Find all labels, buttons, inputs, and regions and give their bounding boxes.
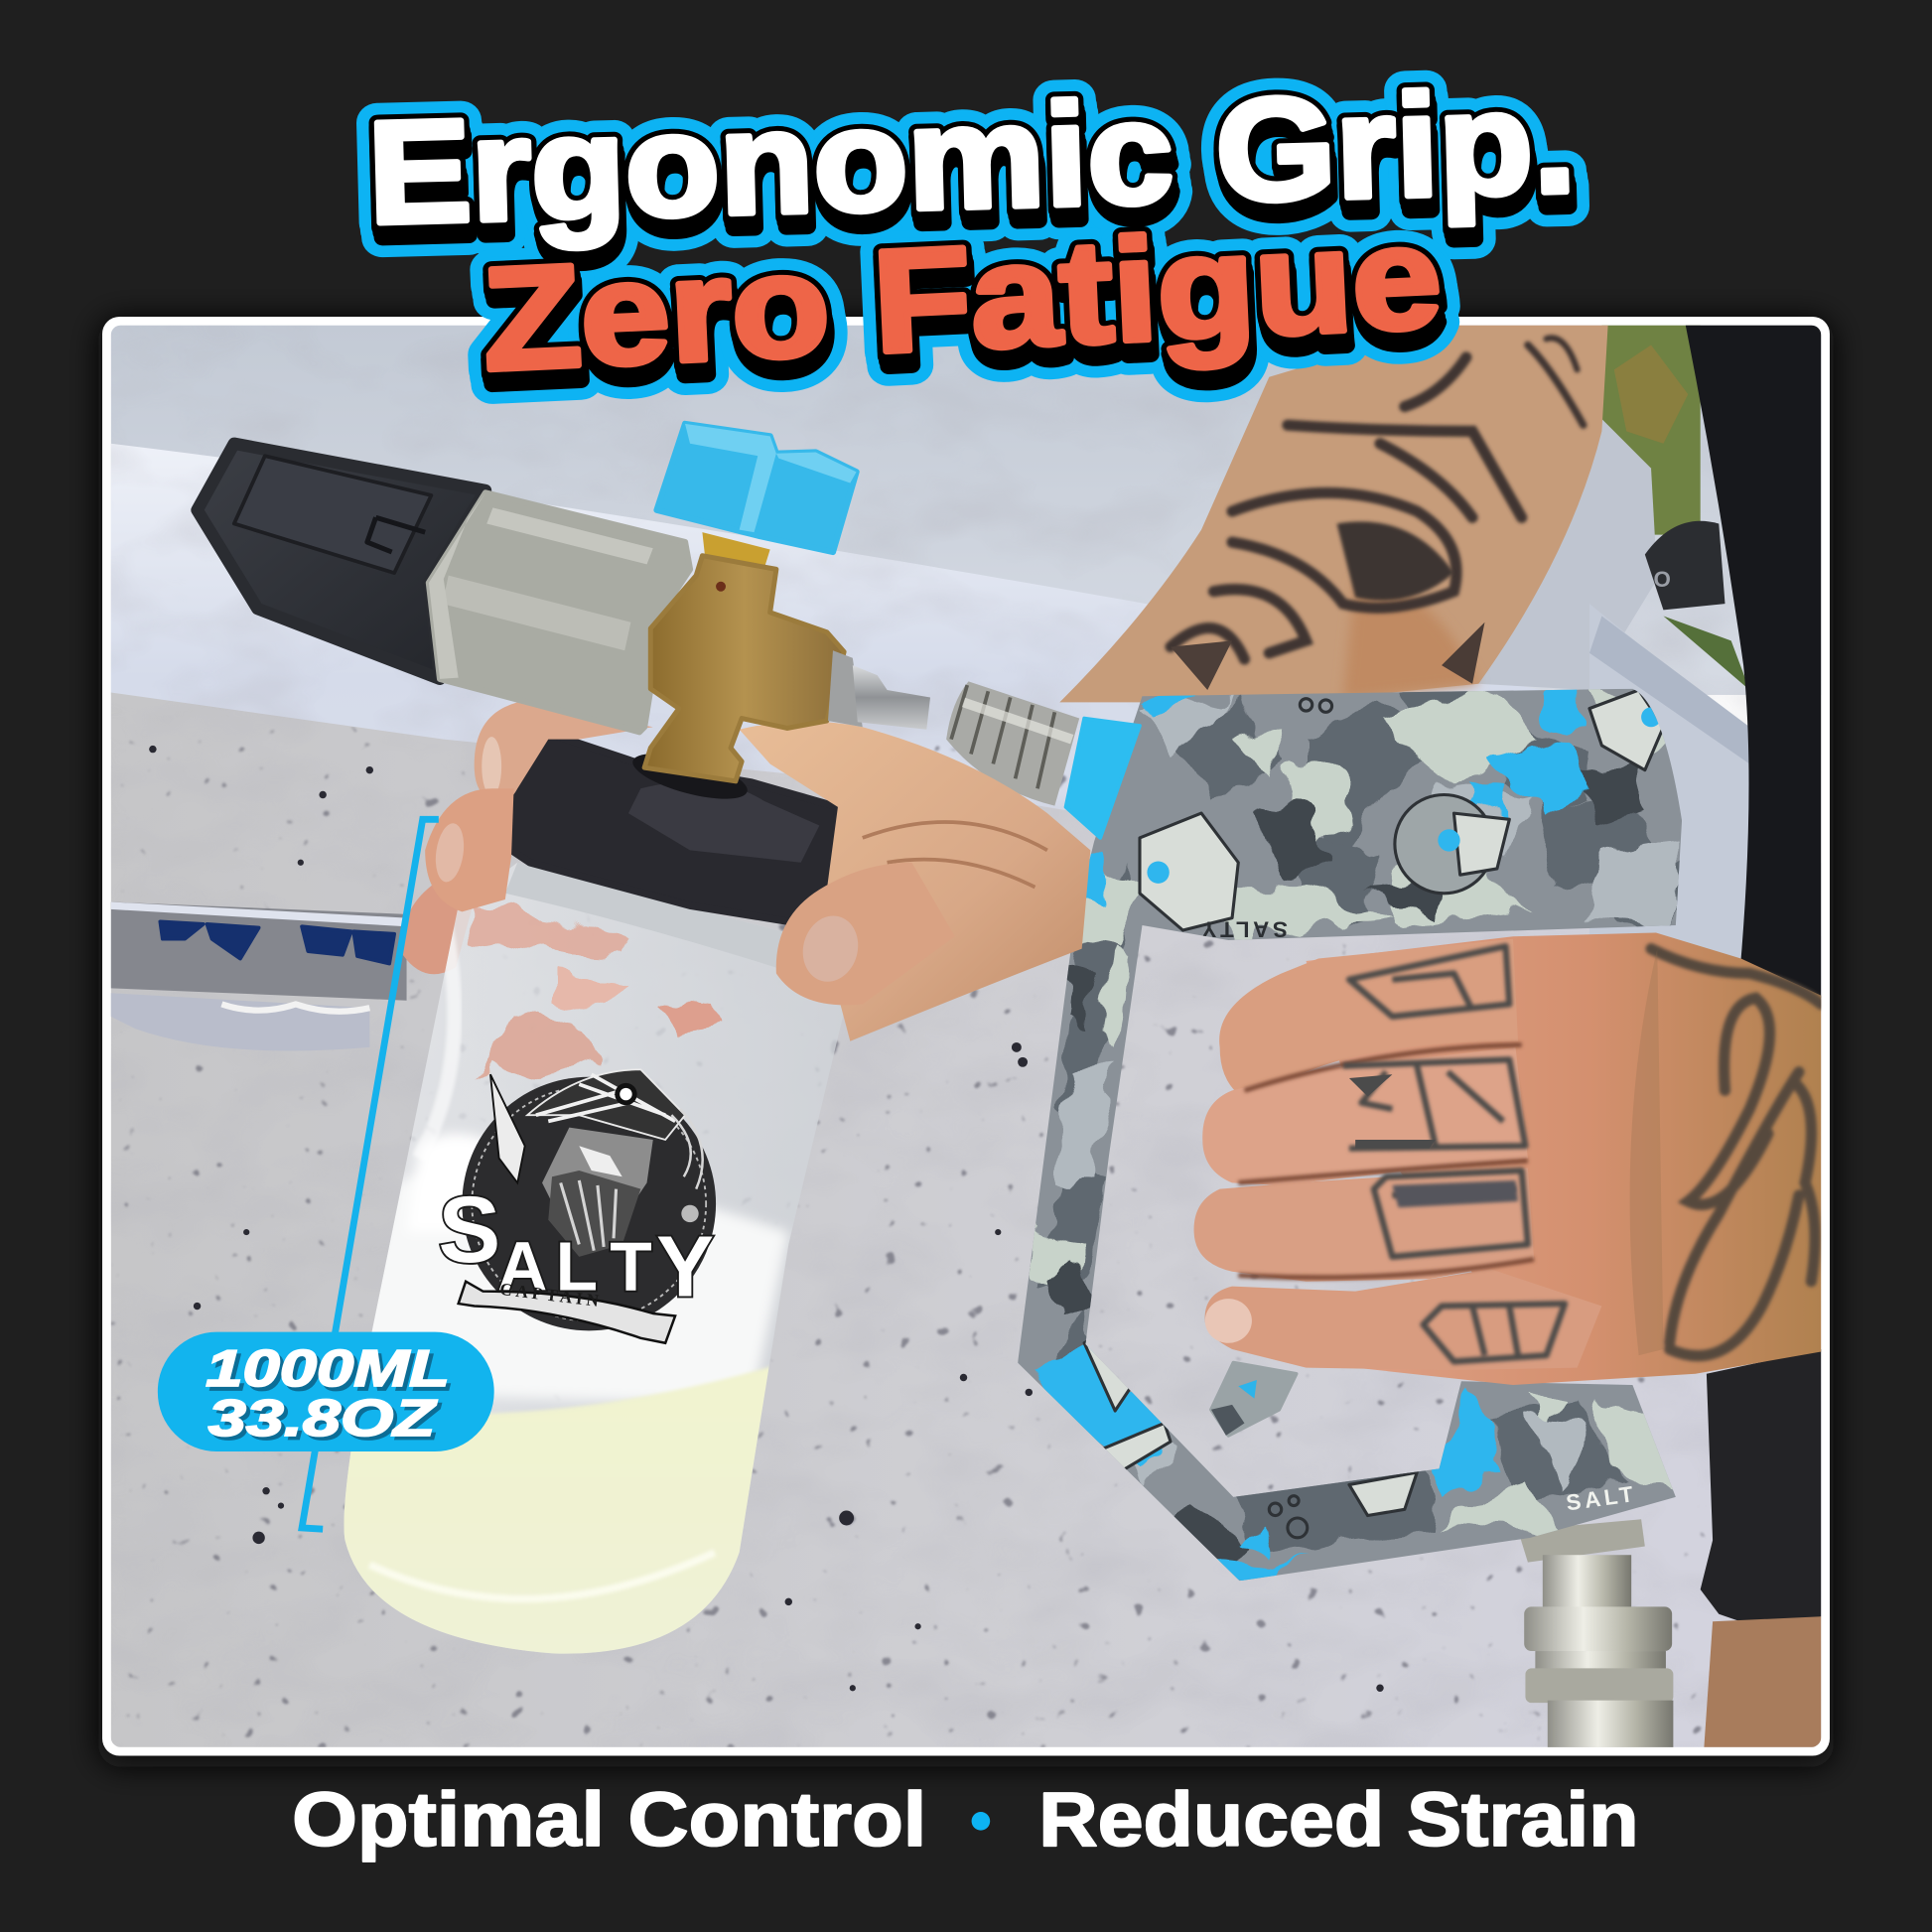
title cyan outline: Ergonomic Grip. xyxy=(368,75,1580,270)
pirate face and beard xyxy=(542,1128,653,1232)
foam residue patches xyxy=(475,905,721,1078)
palm xyxy=(740,722,1090,1041)
cyan knob xyxy=(656,424,857,569)
title black extrusion: Zero Fatigue xyxy=(481,206,1446,411)
background: tree and windshield: O xyxy=(1654,567,1671,592)
logo: Salty Captain: CAPTAIN xyxy=(498,1280,604,1311)
background: black shirt xyxy=(1686,326,1821,998)
title cyan outline: Zero Fatigue xyxy=(482,210,1447,416)
knuckle tattoos xyxy=(1343,946,1565,1361)
title black extrusion: Zero Fatigue xyxy=(482,210,1447,416)
title black extrusion: Ergonomic Grip. xyxy=(368,75,1580,270)
salty wordmark: Y xyxy=(656,1219,714,1315)
benefit: optimal control: Optimal Control xyxy=(292,1777,926,1863)
thumb xyxy=(776,863,955,1005)
title line two: Zero Fatigue xyxy=(480,196,1445,401)
captain ribbon xyxy=(459,1282,675,1343)
title cyan outline xyxy=(366,61,1580,416)
title black extrusion: Zero Fatigue xyxy=(480,201,1445,406)
badge pill xyxy=(158,1332,494,1451)
title cyan outline: Ergonomic Grip. xyxy=(367,68,1579,262)
background: foam covered car xyxy=(111,326,1821,1747)
background: tree and windshield xyxy=(1478,326,1756,961)
title cyan outline: Zero Fatigue xyxy=(480,196,1445,401)
foam cannon xyxy=(198,424,930,781)
badge text shadow: 1000ML xyxy=(209,1344,454,1402)
coupling and hose fitting xyxy=(1518,1519,1673,1749)
sword xyxy=(490,1074,525,1182)
gun body camo: SALTY xyxy=(1198,916,1288,941)
title cyan outline: Zero Fatigue xyxy=(481,203,1446,409)
black nozzle xyxy=(198,444,485,679)
gun body camo: SALT xyxy=(1565,1481,1638,1516)
steel nipple xyxy=(828,650,930,730)
index finger xyxy=(475,702,653,802)
rope xyxy=(671,1109,703,1189)
badge text shadow xyxy=(209,1344,454,1451)
background: shorts xyxy=(1701,1349,1821,1629)
forearm with tattoos xyxy=(1059,326,1608,702)
salty wordmark: S xyxy=(438,1177,500,1282)
title black extrusion: Zero Fatigue xyxy=(480,196,1445,401)
finger four xyxy=(1205,1269,1601,1370)
finger three xyxy=(1194,1169,1534,1282)
left hand xyxy=(425,702,1090,1041)
pirate hat xyxy=(527,1069,685,1140)
large droplets on foam xyxy=(149,746,1384,1692)
brass body xyxy=(644,556,844,781)
badge text: 33.8OZ xyxy=(208,1390,438,1448)
badge text shadow: 33.8OZ xyxy=(211,1394,442,1451)
middle finger xyxy=(425,788,514,911)
trigger xyxy=(1211,1363,1297,1436)
finger one xyxy=(1219,939,1518,1094)
title black extrusion xyxy=(366,61,1580,416)
panel shadow xyxy=(98,318,1834,1767)
camo skull emblems xyxy=(1084,690,1663,1538)
salty wordmark xyxy=(438,1177,714,1315)
background: blue car trim xyxy=(111,901,407,1050)
finger two xyxy=(1202,1047,1528,1185)
steel hose end xyxy=(946,681,1079,806)
grey barrel xyxy=(429,492,690,732)
capacity bracket xyxy=(302,819,439,1529)
wrist tattoos xyxy=(1651,949,1821,1356)
badge text: 1000ML xyxy=(206,1340,450,1398)
rear fingers seen behind bottle xyxy=(402,878,475,974)
finger seams xyxy=(1238,1044,1534,1278)
title cyan outline: Ergonomic Grip. xyxy=(366,61,1578,255)
badge text xyxy=(206,1340,450,1448)
capacity badge xyxy=(158,1332,494,1451)
title black extrusion: Ergonomic Grip. xyxy=(366,66,1578,260)
background: leg xyxy=(1704,1616,1821,1747)
footer benefits xyxy=(292,1777,1639,1863)
gun body camo xyxy=(1011,678,1701,1589)
pressure gun with camo wrap xyxy=(946,678,1701,1589)
right hand with knuckle tattoos xyxy=(1194,932,1821,1385)
salty wordmark: T xyxy=(610,1227,652,1305)
foam cannon cap xyxy=(511,733,838,926)
cyan collar xyxy=(1066,719,1140,838)
benefit: reduced strain: Reduced Strain xyxy=(1038,1777,1639,1863)
panel: photo frame xyxy=(102,317,1830,1756)
salty wordmark: L xyxy=(556,1227,598,1305)
fingernail xyxy=(1205,1299,1252,1343)
camo pattern xyxy=(1029,684,1682,1581)
logo: Salty Captain xyxy=(438,1069,716,1343)
title black extrusion: Ergonomic Grip. xyxy=(367,70,1579,265)
bottle xyxy=(321,863,850,1663)
salty wordmark: A xyxy=(497,1227,547,1305)
title line one: Ergonomic Grip. xyxy=(366,61,1578,255)
panel: product photo xyxy=(111,326,1821,1749)
separator dot xyxy=(972,1812,990,1831)
title xyxy=(366,61,1580,416)
title black extrusion: Ergonomic Grip. xyxy=(366,61,1578,255)
